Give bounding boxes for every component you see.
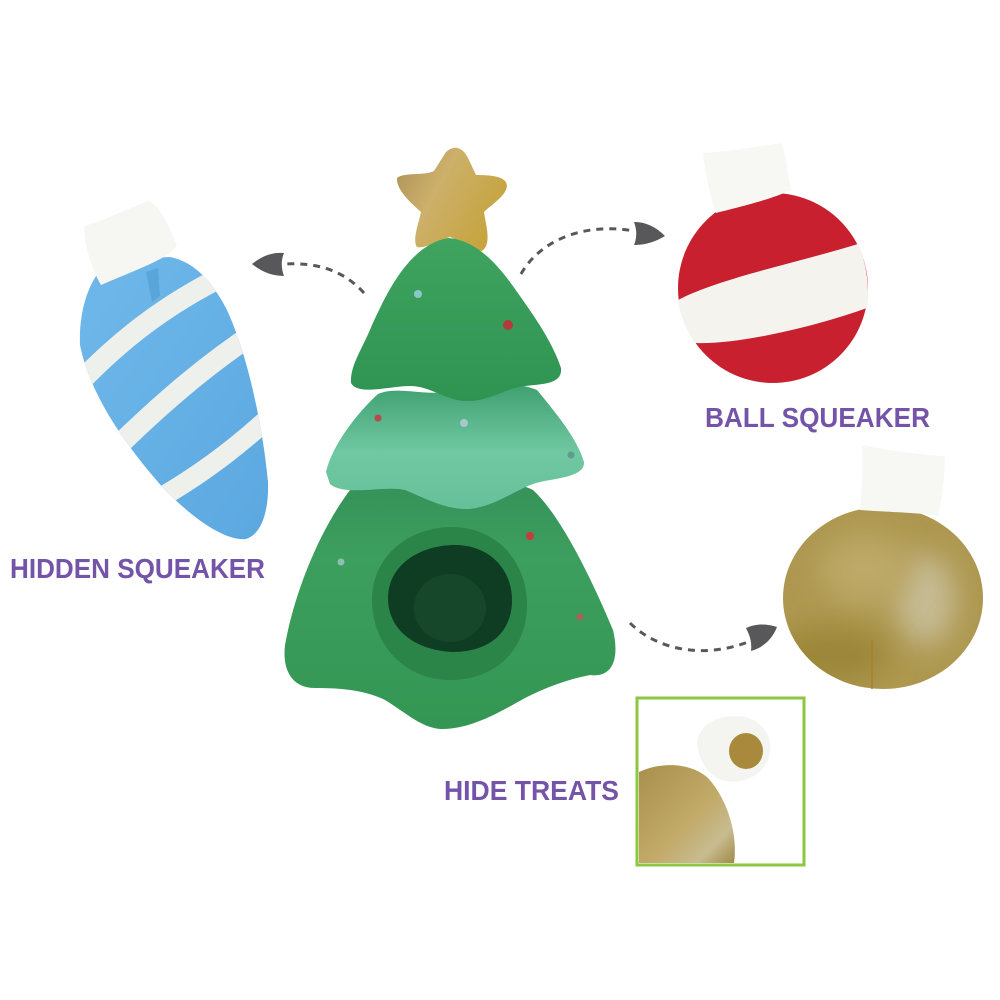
icon: gold ball <box>770 445 983 689</box>
bottom tier <box>284 484 615 729</box>
arrow: tree to ball squeaker <box>521 222 665 274</box>
icon: red ball squeaker <box>678 143 868 383</box>
inset photo: treat pocket <box>637 698 804 865</box>
label: ball squeaker: BALL SQUEAKER <box>705 402 930 433</box>
arrow: tree to gold ball <box>630 623 777 651</box>
arrow: tree to hidden squeaker <box>252 253 364 293</box>
icon: blue bulb hidden squeaker <box>80 201 275 539</box>
top tier <box>351 238 561 401</box>
hole opening <box>388 545 512 652</box>
label: hidden squeaker: HIDDEN SQUEAKER <box>10 553 265 584</box>
hole rim <box>372 527 527 680</box>
middle tier <box>326 384 584 509</box>
icon: plush christmas tree <box>284 238 615 729</box>
label: hide treats: HIDE TREATS <box>444 775 619 806</box>
icon: gold star <box>397 148 507 251</box>
